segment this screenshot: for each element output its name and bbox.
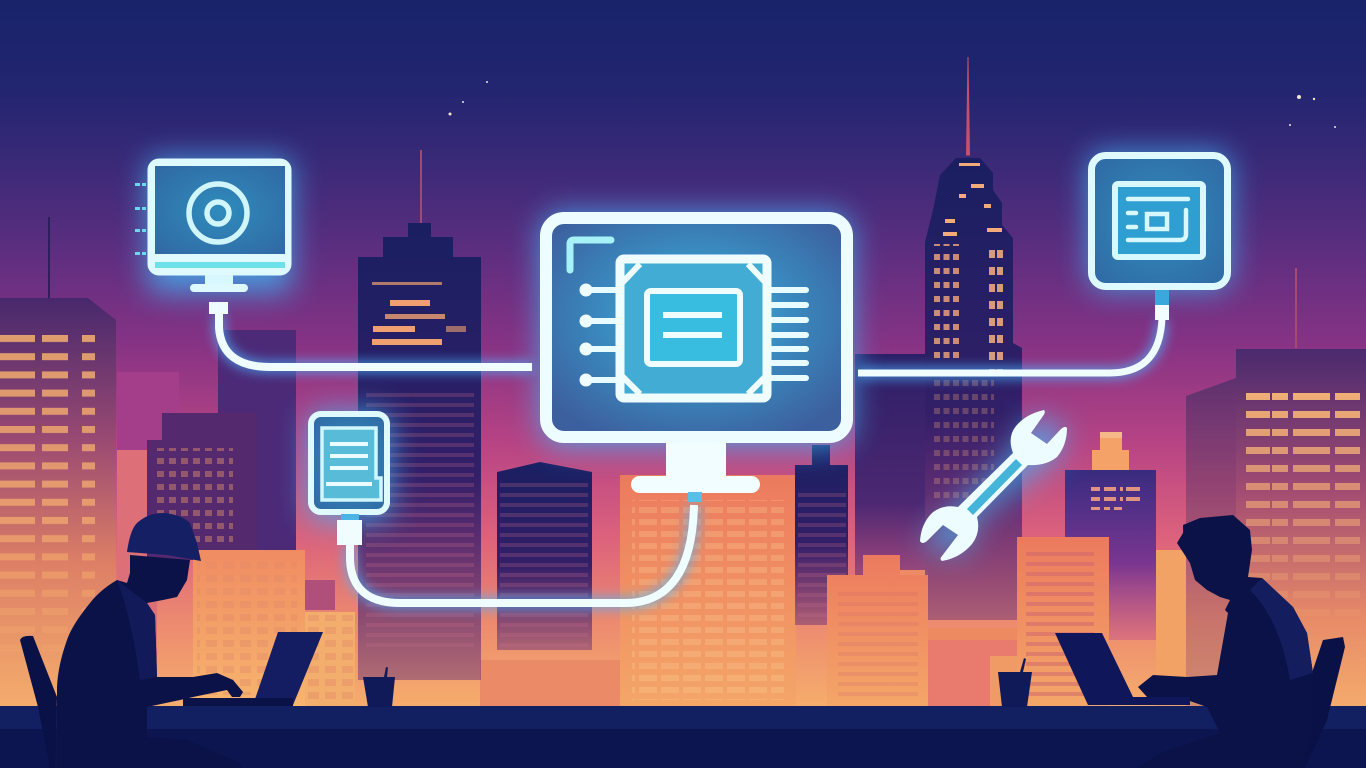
table bbox=[0, 706, 1366, 768]
orange tower right bbox=[1017, 537, 1109, 706]
orange buildings lower left bbox=[193, 550, 355, 706]
silhouette: left worker with hard hat bbox=[57, 513, 243, 768]
left building bbox=[0, 217, 116, 650]
cup left bbox=[363, 667, 395, 707]
silhouette: right worker bbox=[1137, 515, 1313, 768]
icon: wrench bbox=[920, 410, 1067, 561]
orange lower right buildings bbox=[827, 550, 1206, 706]
stars bbox=[448, 81, 1336, 128]
dark centre-left tower bbox=[358, 150, 481, 680]
icon: right device with window bbox=[1092, 156, 1228, 320]
screen corner bracket bbox=[570, 240, 611, 270]
monitor screen bbox=[546, 218, 847, 437]
icon: left monitor with target bbox=[135, 162, 288, 314]
cup right bbox=[998, 658, 1032, 707]
centre-bottom small tower bbox=[497, 462, 592, 650]
processor chip bbox=[620, 259, 767, 398]
icon: central computer with processor bbox=[546, 218, 847, 502]
laptop left bbox=[183, 632, 323, 706]
laptop right bbox=[1055, 633, 1190, 705]
cable halo bbox=[219, 314, 1162, 603]
orange centre building bbox=[620, 475, 796, 706]
monitor stand bbox=[666, 443, 726, 479]
right building bbox=[1186, 268, 1366, 706]
icon: phone device bbox=[311, 414, 387, 545]
left mid building bbox=[147, 413, 257, 560]
cable: main monitor to right device bbox=[858, 318, 1162, 373]
far skyline bbox=[117, 330, 1020, 706]
chair left bbox=[20, 636, 57, 768]
inner panel bbox=[647, 291, 740, 364]
chair right bbox=[1280, 637, 1345, 768]
processor pins bbox=[586, 290, 806, 380]
cable: phone to main monitor bbox=[350, 505, 694, 603]
tall skyscraper bbox=[925, 57, 1022, 620]
cable: left screen to main monitor bbox=[219, 312, 532, 367]
device halos bbox=[147, 152, 1231, 555]
right small tower with cap bbox=[1065, 432, 1156, 640]
monitor base bbox=[631, 476, 760, 493]
right of centre tower bbox=[795, 445, 848, 625]
